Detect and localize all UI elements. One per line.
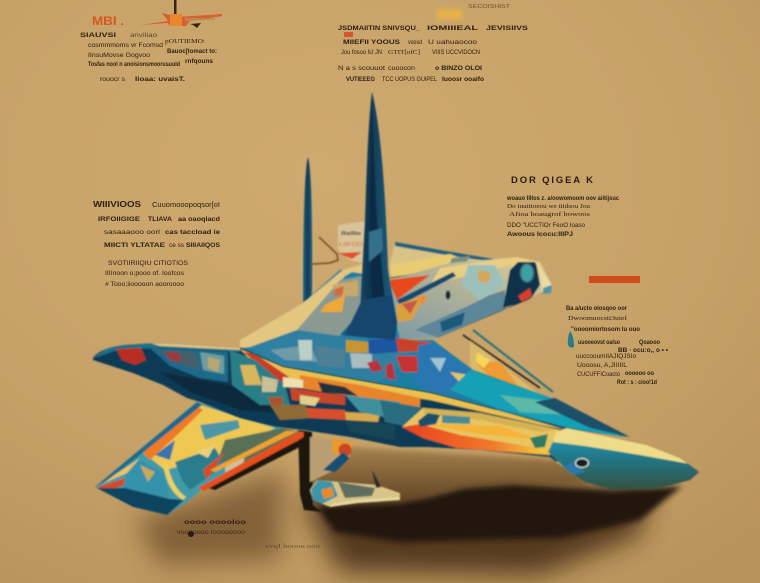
red label bar [589,276,640,283]
body lines: Iioaa: uvaisT. [135,76,185,83]
wires and tail flag [312,221,366,264]
left text block: IIIInoon o;pooo of. Ioofcos [105,270,185,277]
body lines: Bauoc[tomact to: [167,48,217,55]
right lower text block: uuccooumIIAJIQJSIo [576,353,636,360]
body lines: woauo IIIIos z. a/oowomoom oov aiitijsuc [506,195,619,202]
right lower text block: Qoaooo [639,339,660,346]
top left text block [80,14,217,83]
body lines: TCC UOPUS GUIPEL [382,76,437,83]
heading: DOR QIGEA K [511,175,593,186]
body lines: VUTIEEEG [346,76,375,83]
left text block [93,200,221,288]
red marker [344,32,353,37]
body lines: o BINZO OLOI [435,65,482,72]
left text block: IRFOIIGIGE [98,216,141,223]
right lower text block: oooooo oo [625,370,654,377]
body lines: IInsuMovse Gogvoo [88,52,150,59]
teal marker [568,331,574,348]
body lines: DDO "UCCTIOr FeoO Ioaso [507,222,585,229]
left text block: ce ss [169,242,185,249]
delta wing body [240,264,630,437]
right lower text block: uuooeovst oaIso [578,339,620,346]
body lines: N a s scouuot [338,65,385,72]
flame panel [402,408,570,470]
body lines: rnfqouns [185,58,213,65]
right lower text block: Dwoomuocsti3uief [568,315,628,322]
right lower text block: Ba a/ucto olosqoo oor [566,305,627,312]
upper right engine pod [385,257,552,342]
body lines: Do iuuittoeou we tiidsou Jou [507,203,591,210]
body lines: Iuoosr ooaifo [442,76,484,83]
painted panel collage [230,350,425,440]
bottom caption: oooo ooooIoo [184,519,246,526]
body lines: SIAUVSI [80,32,116,39]
right upper text block [506,175,619,238]
left text block: WIIIVIOOS [93,200,142,209]
body lines: MIIEFII YOOUS [343,39,401,46]
body lines: voosd [408,39,422,46]
body lines: Tosfas nool n anoisionsmoorusuuld [88,61,180,68]
left text block: SIIIAIIQOS [186,242,221,249]
body lines [80,32,217,83]
left text block: sasaaaooo oorl [104,229,161,236]
right lower text block: "oooomiortosom Iu ouo [571,326,640,333]
yellow stripe [240,349,567,430]
main tail fin [340,92,397,340]
body lines: Afioa hoaugrof bowoos [509,211,591,218]
bottom caption: vuoooooo Ioooooooo [177,529,245,536]
right lower text block: Rot : s : cioo!1d [617,379,657,386]
left text block: # Tooo;iiooooon aooroooo [105,281,184,288]
lower left wing [90,400,310,520]
rear right wing [463,330,570,415]
nose and cockpit [93,342,275,413]
bottom caption [177,519,246,536]
body lines: pOUTIEMO: [165,38,205,45]
left text block: aa oaoqlacd [178,216,220,223]
body lines: U uahuaocoo [428,39,477,46]
small rear fin [303,157,312,302]
left text block: TLIAVA [148,216,172,223]
aircraft illustration [90,92,699,520]
top right text block [338,4,529,83]
body lines: JSDMAIITIN SNIVSQU_ [338,25,420,32]
wires and tail flag: LIIFOO [339,242,364,248]
caption dot [188,531,194,537]
main fuselage [93,343,699,490]
ground shadow [135,445,682,575]
body lines: GTIT[ofC] [388,49,420,56]
upper back wing strip [390,242,493,283]
right lower text block: Uooosu, A,JIIIIIL [577,362,627,369]
wires and tail flag: IIsIIo [341,231,362,237]
highlight patch [437,9,462,19]
heading: MBI . [92,14,124,28]
body lines: cuoocon [388,65,415,72]
body lines [338,4,529,83]
body lines [506,195,619,238]
left text block: Cuuomooopoqsor[oI [152,202,220,209]
body lines: Awoous Icocu:IIIPJ [507,231,573,238]
right lower text block [566,305,669,386]
icon: small orange plane [140,0,222,28]
body lines: JEVISIIVS [486,25,529,32]
bottom faint caption: vvqI hooou ooo [265,543,320,550]
left text block: SVOTIIRIIQIU CITIOTIOS [108,260,189,267]
body lines: cosmmmoms vr Fcomsd [88,42,163,49]
body lines: VIIIS UCCVIDOCN [432,49,480,56]
body lines: Jou fosoo IU JN [341,49,382,56]
body lines: anviliao [130,32,157,39]
right lower text block: CUCUFFICoacto [577,371,620,378]
right lower text block: BB · ocu:o,, o • • [618,347,669,354]
left text block: MIICTI YLTATAE [104,242,166,249]
body lines: SECOISHIST [468,4,511,10]
left text block: cas taccload ie [165,229,220,236]
body lines: IOMIIIEAL [427,25,478,32]
nose cone [547,440,699,490]
stem and lower pod [298,430,400,512]
body lines: rouocr s [100,76,126,83]
